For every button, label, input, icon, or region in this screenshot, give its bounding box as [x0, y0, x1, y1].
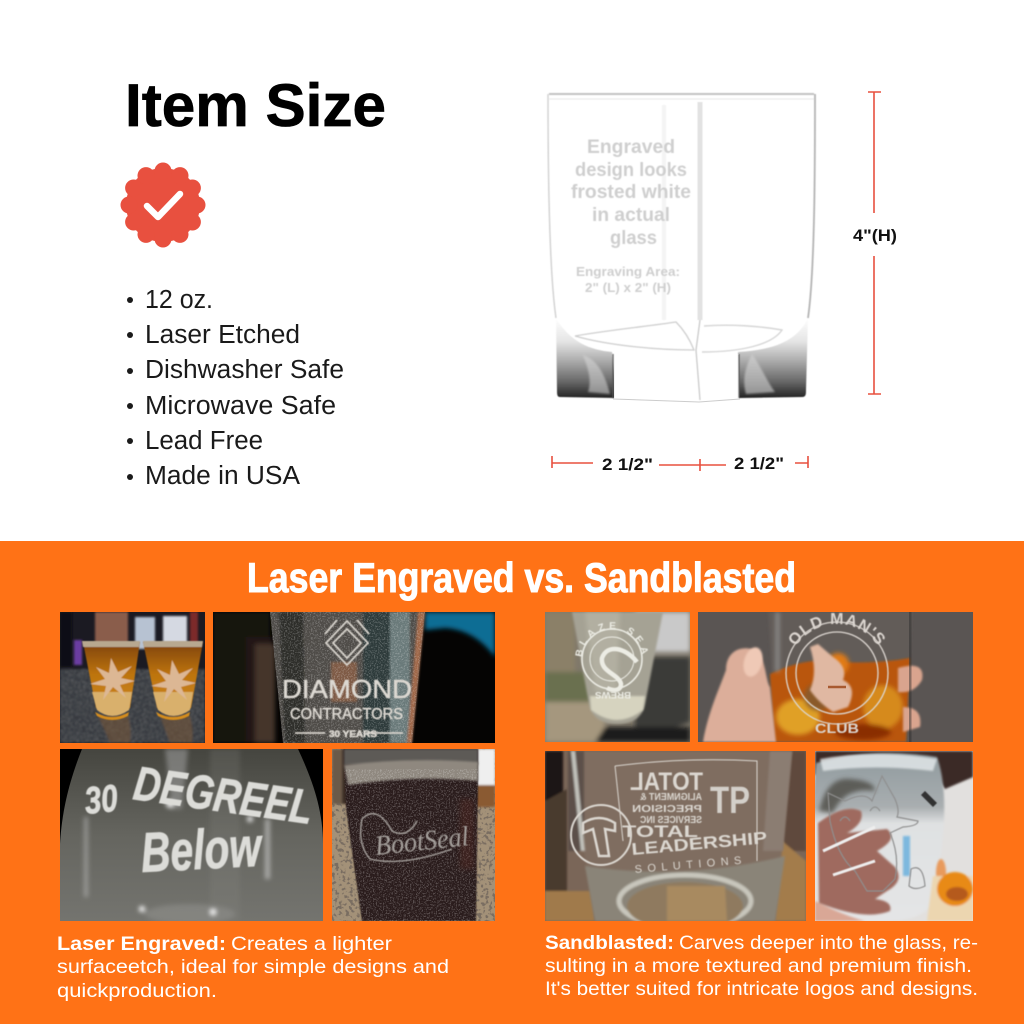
photo: dragon shot glass [545, 612, 690, 742]
feature list: Microwave Safe [145, 392, 336, 420]
photo: Total Leadership glass: TP [710, 780, 750, 822]
icon: check badge [120, 162, 206, 248]
photo: Diamond Contractors glass [213, 612, 495, 743]
engraved note: 2" (L) x 2" (H) [585, 280, 671, 295]
engraved note [571, 137, 691, 295]
photo: BootSea glass with soda: BootSeal [373, 821, 470, 862]
feature list: Laser Etched [145, 321, 300, 349]
photo: Total Leadership glass: TOTAL [622, 822, 698, 841]
feature list: 12 oz. [145, 286, 213, 314]
text: sandblasted description: Carves deeper into the glass, re- [679, 932, 978, 954]
feature list: Lead Free [145, 427, 263, 455]
text: laser engraved description [57, 933, 449, 1002]
photo: shot glasses with leaf [60, 612, 205, 743]
photo: Diamond Contractors glass: DIAMOND [282, 674, 412, 704]
photo: Old Man's Club glass: CLUB [815, 720, 859, 736]
photo: Total Leadership glass: LEADERSHIP [631, 828, 768, 859]
photo: Old Man's Club glass [698, 612, 973, 742]
heading: Laser Engraved vs. Sandblasted: Laser Engraved vs. Sandblasted [247, 554, 796, 601]
dimension: width: 2 1/2" [602, 455, 653, 474]
photo: Total Leadership glass: SERVICES INC [640, 815, 702, 826]
glass illustration [548, 94, 815, 402]
photo: cat stemless glass [815, 751, 973, 921]
photo: Old Man's Club glass: OLD MAN'S [788, 612, 886, 644]
photo: dragon shot glass: BREWS [595, 690, 631, 700]
photo: dragon shot glass: BLAZE SEA [574, 622, 648, 657]
text: sandblasted description: Sandblasted: [545, 932, 674, 954]
photo: Total Leadership glass: ALIGNMENT & [640, 792, 702, 803]
dimension: height [853, 92, 897, 394]
dimension: width [552, 454, 808, 474]
text: sandblasted description: It's better suited for intricate logos and designs. [545, 978, 978, 1000]
text: laser engraved description: Creates a lighter [231, 933, 393, 955]
feature list: Dishwasher Safe [145, 356, 344, 384]
photo: Diamond Contractors glass: CONTRACTORS [290, 706, 403, 723]
engraved note: design looks [575, 160, 687, 181]
glass outline [548, 94, 815, 400]
text: sandblasted description: sulting in a more textured and premium finish. [545, 955, 972, 977]
photo: 30 Degreel Below glass: Below [139, 815, 265, 884]
title: Item Size: Item Size [125, 72, 386, 139]
panel: orange comparison [0, 541, 1024, 1024]
photo: Diamond Contractors glass: 30 YEARS [329, 729, 377, 739]
engraved note: frosted white [571, 182, 691, 203]
text: sandblasted description [545, 932, 978, 1000]
photo: BootSea glass with soda [332, 749, 495, 921]
text: laser engraved description: Laser Engraved: [57, 933, 226, 955]
glass base shadows [556, 318, 808, 402]
photo: Total Leadership glass: SOLUTIONS [634, 855, 742, 876]
engraved note: glass [610, 228, 657, 249]
engraved note: Engraving Area: [576, 264, 680, 279]
feature list [127, 286, 344, 490]
photo: Total Leadership glass: TOTAL [630, 768, 703, 796]
photo: Total Leadership glass [545, 751, 806, 921]
engraved note: in actual [592, 205, 670, 226]
photo: Total Leadership glass: PRECISION [632, 804, 702, 815]
photo: 30 Degreel Below glass: 30 [83, 778, 120, 823]
dimension: height: 4"(H) [853, 226, 897, 245]
photo: 30 Degreel Below glass [60, 749, 323, 921]
engraved note: Engraved [587, 137, 675, 158]
feature list: Made in USA [145, 462, 300, 490]
text: laser engraved description: quickproduction. [57, 980, 217, 1002]
dimension: width: 2 1/2" [734, 454, 784, 473]
text: laser engraved description: surfaceetch, ideal for simple designs and [57, 956, 449, 978]
